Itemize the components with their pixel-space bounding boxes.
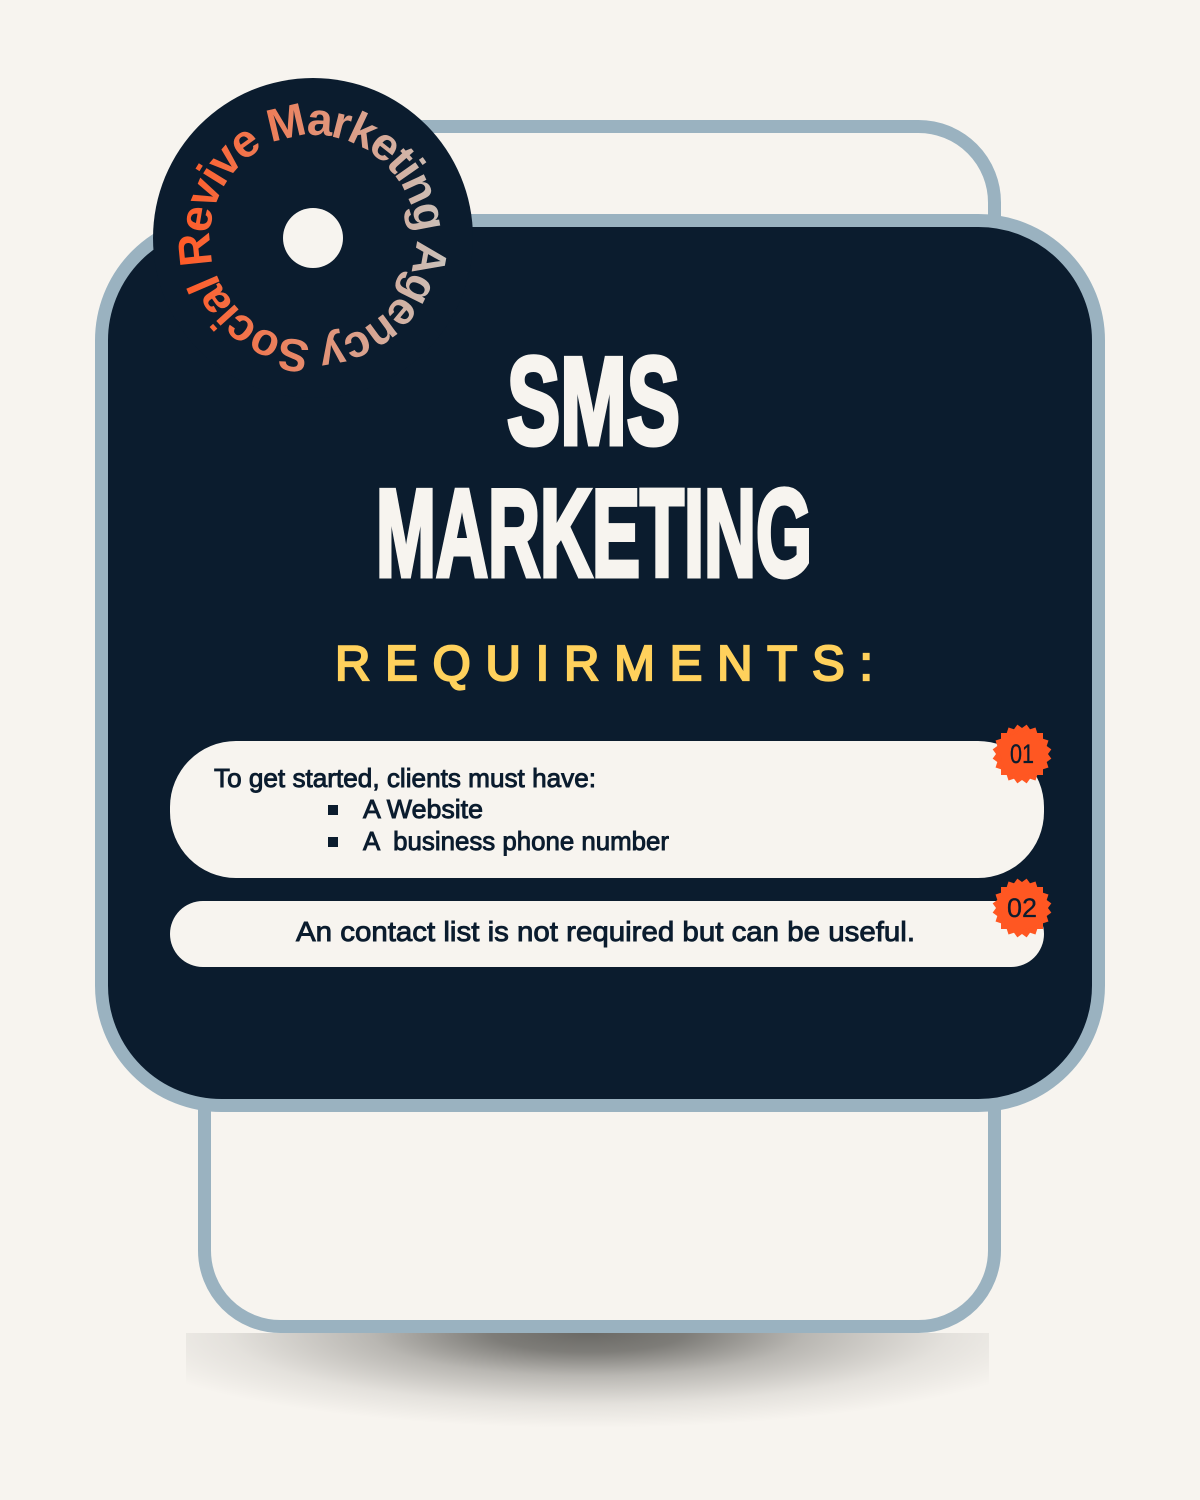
badge: 02 bbox=[993, 879, 1051, 937]
intro text: To get started, clients must have: bbox=[214, 763, 596, 793]
title: SMS: SMS bbox=[507, 333, 680, 471]
back outlined card bbox=[204, 126, 994, 1326]
circular badge bbox=[153, 78, 473, 372]
badge: 01: 01 bbox=[1010, 739, 1034, 769]
badge centre dot bbox=[283, 208, 343, 268]
badge: 01 bbox=[993, 725, 1051, 783]
circular badge text: Social Revive Marketing Agency bbox=[178, 103, 446, 372]
badge: 02: 02 bbox=[1007, 893, 1037, 923]
note text: An contact list is not required but can be useful. bbox=[296, 916, 915, 947]
title: MARKETING: MARKETING bbox=[376, 465, 812, 603]
bullet: website: A Website bbox=[363, 794, 483, 824]
panel: requirement 01 bbox=[170, 741, 1044, 878]
drop shadow under back card bbox=[186, 1333, 989, 1428]
bullet: phone number: A business phone number bbox=[363, 826, 669, 856]
panel: requirement 02 bbox=[170, 901, 1044, 967]
main navy panel bbox=[102, 220, 1098, 1106]
subtitle: requirements: REQUIRMENTS: bbox=[335, 637, 873, 691]
